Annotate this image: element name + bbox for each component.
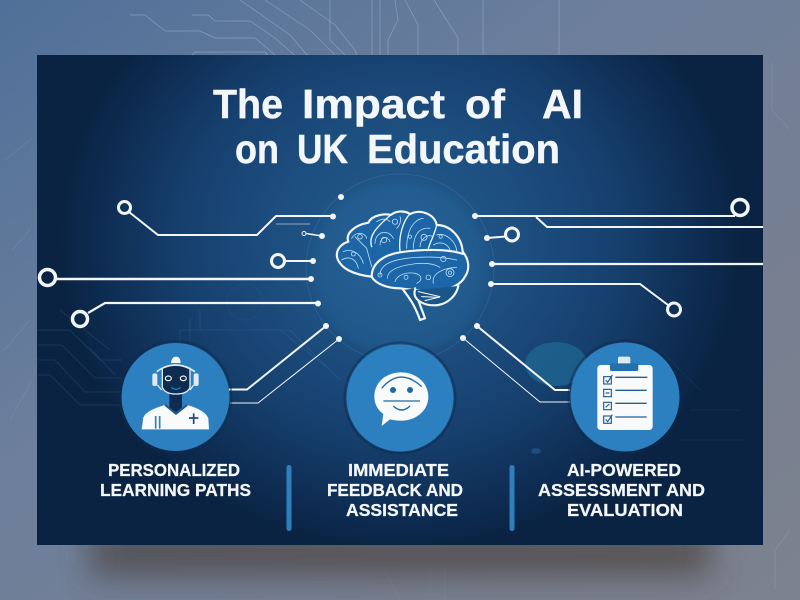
label: ASSESSMENT AND: [538, 480, 705, 500]
divider: [510, 465, 514, 531]
brain halo ring: [306, 174, 494, 362]
main panel: [37, 55, 763, 545]
connector lines right: [460, 200, 763, 402]
divider: [286, 465, 292, 531]
label: FEEDBACK AND: [327, 480, 463, 500]
title: The: [213, 81, 283, 127]
title: [213, 81, 583, 172]
icon circle: chat face: [344, 342, 456, 454]
icon circle: clipboard: [568, 340, 682, 454]
panel shadow: [90, 530, 710, 575]
label: IMMEDIATE: [348, 460, 449, 480]
title: on: [235, 126, 279, 172]
card: AI-powered assessment: [538, 340, 705, 520]
title: of: [465, 81, 505, 127]
icon: brain: [337, 211, 468, 320]
title: AI: [542, 81, 583, 127]
label: [327, 460, 463, 520]
label: EVALUATION: [567, 500, 683, 520]
card: personalized learning paths: [100, 341, 251, 500]
label: AI-POWERED: [567, 460, 681, 480]
label: [538, 460, 705, 520]
connector lines left: [40, 194, 344, 403]
panel circuit texture: [38, 284, 745, 440]
card: immediate feedback: [327, 342, 463, 520]
teal blob behind assessment icon: [525, 342, 587, 386]
title: Education: [367, 126, 560, 172]
label: LEARNING PATHS: [100, 480, 251, 500]
label: ASSISTANCE: [346, 500, 458, 520]
title: UK: [297, 126, 348, 172]
label: [100, 460, 251, 500]
label: PERSONALIZED: [108, 460, 240, 480]
icon circle: robot tutor: [120, 341, 232, 453]
title: Impact: [302, 81, 445, 127]
